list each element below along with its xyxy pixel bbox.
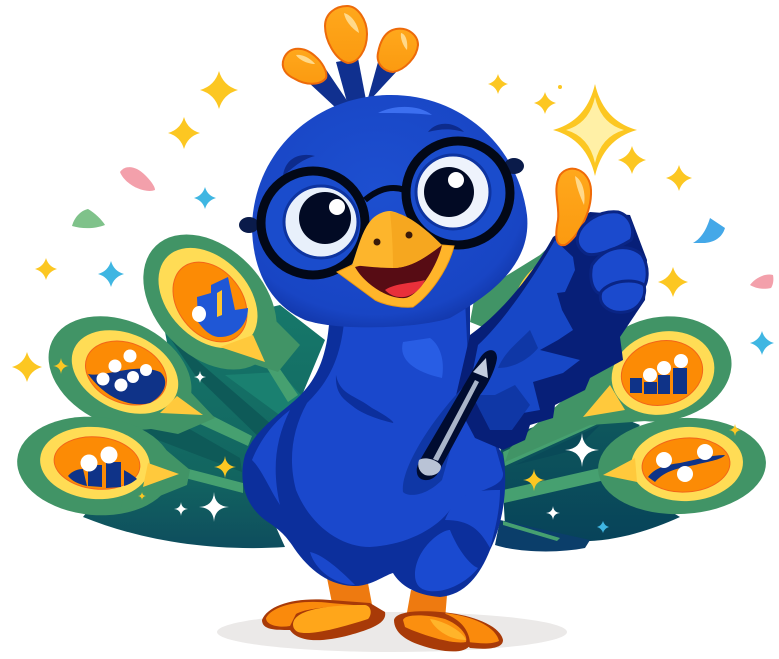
crest (283, 6, 418, 108)
ground shadow (217, 612, 567, 652)
feather: middle left (30, 294, 215, 452)
green feather behind arm (470, 240, 556, 330)
feather: lower right (596, 414, 768, 518)
tail fan underlay (83, 305, 680, 551)
glasses: lens right (406, 141, 510, 245)
sparkles: yellow (12, 71, 741, 500)
beak (337, 211, 454, 307)
head (239, 95, 527, 327)
icon: fingers (577, 212, 647, 312)
feather stems (185, 360, 605, 541)
sparkles: blue (98, 187, 774, 533)
legs and feet (262, 578, 503, 651)
glasses: lens left (261, 171, 365, 275)
pen with shadow (403, 350, 497, 495)
body (242, 300, 505, 597)
glasses: bridge (365, 188, 405, 200)
wing with hand (455, 169, 647, 450)
feather: lower left (13, 410, 190, 522)
sparkles: white (174, 371, 599, 522)
confetti (72, 167, 773, 289)
feather: upper right (505, 306, 740, 462)
icon: thumb (556, 169, 591, 245)
glasses: temple arms (239, 158, 524, 233)
feather: upper left (117, 208, 303, 396)
